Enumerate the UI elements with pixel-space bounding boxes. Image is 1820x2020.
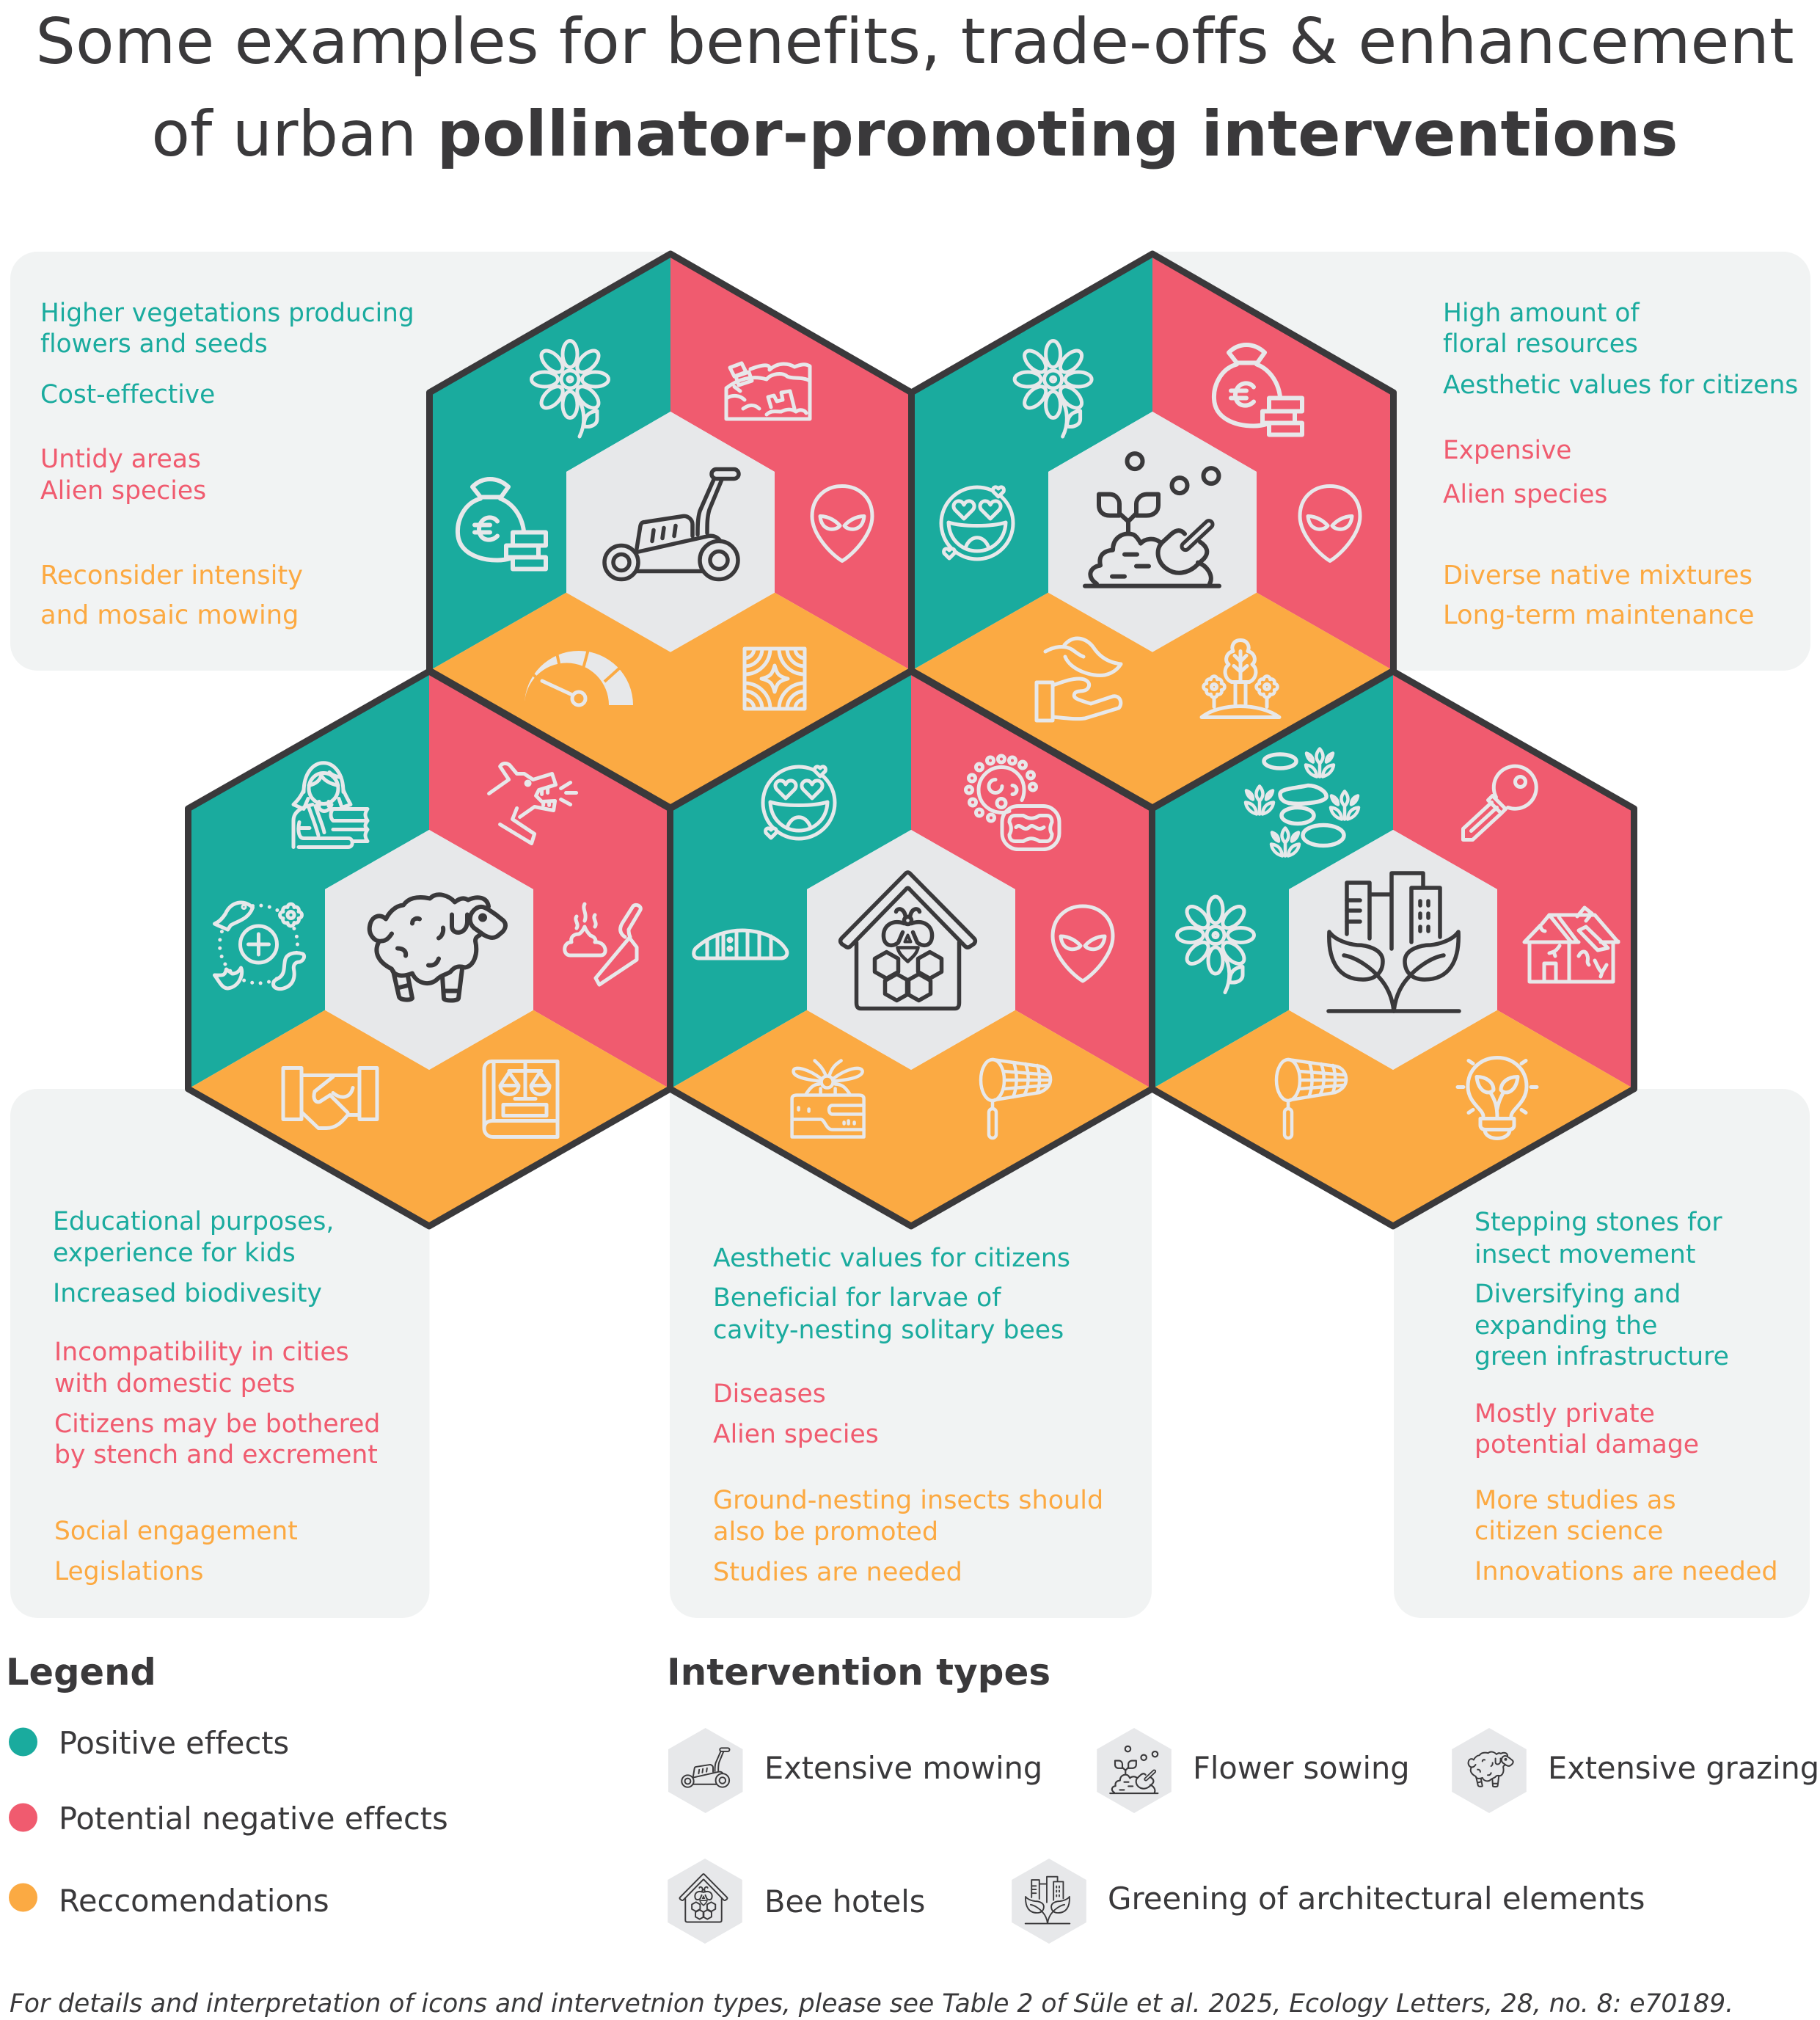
icon: money bag [458, 479, 546, 569]
icon: gauge [525, 649, 633, 705]
icon: alien [1300, 486, 1360, 561]
panel: extensive mowing text: Higher vegetations producing [40, 299, 414, 328]
icon: money bag [1214, 345, 1302, 434]
icon: alien [1053, 906, 1113, 981]
type: flower sowing [1097, 1728, 1410, 1813]
hexagon: extensive grazing [188, 671, 670, 1226]
legend item: potential negative effects: Potential negative effects [59, 1801, 448, 1837]
panel: greening text: Stepping stones for [1474, 1208, 1722, 1237]
panel: bee hotels text: Aesthetic values for citizens [713, 1244, 1070, 1273]
panel: flower sowing text: Diverse native mixtures [1443, 561, 1753, 591]
panel: greening text: expanding the [1474, 1311, 1657, 1341]
icon: native trees [1202, 640, 1279, 718]
panel: extensive mowing text: Reconsider intensity [40, 561, 303, 591]
panel: extensive grazing text: Citizens may be bothered [54, 1410, 380, 1439]
type: greening of architectural elements: Greening of architectural elements [1108, 1881, 1645, 1917]
icon: light bulb [1458, 1058, 1537, 1139]
panel: extensive mowing text: Untidy areas [40, 445, 201, 474]
panel: extensive mowing text: flowers and seeds [40, 329, 268, 359]
panel: greening text: citizen science [1474, 1517, 1663, 1546]
panel: extensive grazing text: Social engagement [54, 1517, 298, 1546]
icon: law book [484, 1061, 558, 1137]
panel: bee hotels text: Studies are needed [713, 1558, 962, 1587]
legend [6, 1651, 448, 1919]
panel: flower sowing text: Expensive [1443, 436, 1571, 465]
icon: flower [1015, 340, 1092, 437]
icon: alien [812, 486, 872, 561]
type: extensive mowing [668, 1728, 1042, 1813]
icon: nesting log [694, 930, 787, 958]
type: bee hotels [668, 1859, 925, 1944]
panel: greening text [1394, 1089, 1810, 1618]
hexagon: extensive mowing [430, 254, 911, 808]
panel: flower sowing text: Alien species [1443, 480, 1607, 509]
panel: flower sowing text: Long-term maintenance [1443, 600, 1754, 630]
panel: flower sowing text [1152, 252, 1810, 671]
panel: greening text: green infrastructure [1474, 1342, 1729, 1371]
title [35, 5, 1794, 171]
panel: greening text: More studies as [1474, 1486, 1676, 1515]
icon: greening buildings [1329, 873, 1459, 1011]
panel: greening text: Diversifying and [1474, 1280, 1681, 1309]
icon: key [1463, 766, 1536, 839]
panel: bee hotels text: also be promoted [713, 1517, 938, 1547]
icon: bee hotel [841, 872, 975, 1008]
footnote: For details and interpretation of icons and intervetnion types, please see Table 2 of Süle et al. 2025, Ecology Letters, 28, no. 8: e70189. [10, 1989, 1733, 2019]
intervention types [667, 1651, 1819, 1944]
panel: greening text: insect movement [1474, 1240, 1695, 1269]
hexagon: flower sowing [911, 254, 1394, 808]
panel: greening text: Innovations are needed [1474, 1557, 1778, 1586]
panel: extensive grazing text [10, 1089, 430, 1618]
icon: mosaic pattern [745, 649, 805, 709]
icon: sowing plant [1085, 453, 1219, 586]
icon: sheep [370, 894, 505, 1001]
type: bee hotels: Bee hotels [764, 1884, 925, 1919]
intervention types heading: Intervention types [667, 1651, 1050, 1693]
panel: greening text: Mostly private [1474, 1399, 1655, 1429]
icon: flower [1177, 897, 1254, 992]
icon: hand and leaf [1037, 638, 1121, 721]
type: extensive grazing: Extensive grazing [1548, 1750, 1819, 1786]
title: Some examples for benefits, trade-offs & enhancement [35, 5, 1794, 79]
panel: extensive grazing text: Incompatibility in cities [54, 1338, 349, 1367]
panel: extensive grazing text: by stench and excrement [54, 1440, 378, 1470]
type: extensive grazing [1452, 1728, 1819, 1813]
legend item: recommendations: Reccomendations [59, 1883, 329, 1919]
icon: biodiversity loop [214, 903, 304, 989]
type: flower sowing: Flower sowing [1193, 1750, 1410, 1786]
icon: stepping stones [1246, 748, 1359, 856]
icon: ground nesting bee [792, 1061, 864, 1137]
icon: love face [763, 767, 835, 839]
hexagon: bee hotels [670, 671, 1152, 1226]
type: extensive mowing: Extensive mowing [764, 1750, 1042, 1786]
icon: insect net [981, 1060, 1050, 1138]
panel: bee hotels text [670, 1089, 1152, 1618]
icon: damaged house [1524, 908, 1618, 982]
panel: bee hotels text: Ground-nesting insects should [713, 1486, 1103, 1515]
icon: excrement and trowel [565, 904, 640, 985]
title: of urban pollinator-promoting interventions [151, 98, 1678, 171]
icon: flower [531, 340, 609, 437]
icon: lawn mower [604, 470, 739, 580]
panel: extensive mowing text: Cost-effective [40, 380, 215, 409]
icon: child with books [293, 763, 368, 847]
panel: bee hotels text: Beneficial for larvae of [713, 1283, 1001, 1313]
icon: insect net [1276, 1060, 1346, 1138]
legend item: positive effects: Positive effects [59, 1725, 289, 1761]
icon: barking dog [489, 763, 577, 844]
icon: untidy area [726, 363, 810, 419]
type: greening of architectural elements [1012, 1859, 1645, 1944]
panel: flower sowing text: High amount of [1443, 299, 1640, 328]
panel: extensive mowing text: Alien species [40, 476, 206, 506]
panel: extensive grazing text: Educational purposes, [53, 1207, 334, 1236]
panel: flower sowing text: Aesthetic values for citizens [1443, 371, 1798, 400]
panel: extensive grazing text: Legislations [54, 1557, 203, 1586]
panel: bee hotels text: Alien species [713, 1420, 879, 1449]
icon: love face [941, 487, 1013, 559]
panel: greening text: potential damage [1474, 1430, 1699, 1459]
hexagon: greening of architectural elements [1152, 671, 1634, 1226]
icon: germs and soap [965, 756, 1059, 850]
panel: flower sowing text: floral resources [1443, 329, 1638, 359]
panel: extensive grazing text: experience for kids [53, 1239, 296, 1268]
panel: extensive mowing text: and mosaic mowing [40, 600, 299, 630]
panel: extensive grazing text: Increased biodivesity [53, 1279, 322, 1308]
icon: handshake [283, 1068, 377, 1128]
panel: bee hotels text: cavity-nesting solitary bees [713, 1316, 1064, 1345]
panel: bee hotels text: Diseases [713, 1379, 826, 1409]
panel: extensive mowing text [10, 252, 670, 671]
legend heading: Legend [6, 1651, 156, 1693]
panel: extensive grazing text: with domestic pets [54, 1369, 295, 1399]
